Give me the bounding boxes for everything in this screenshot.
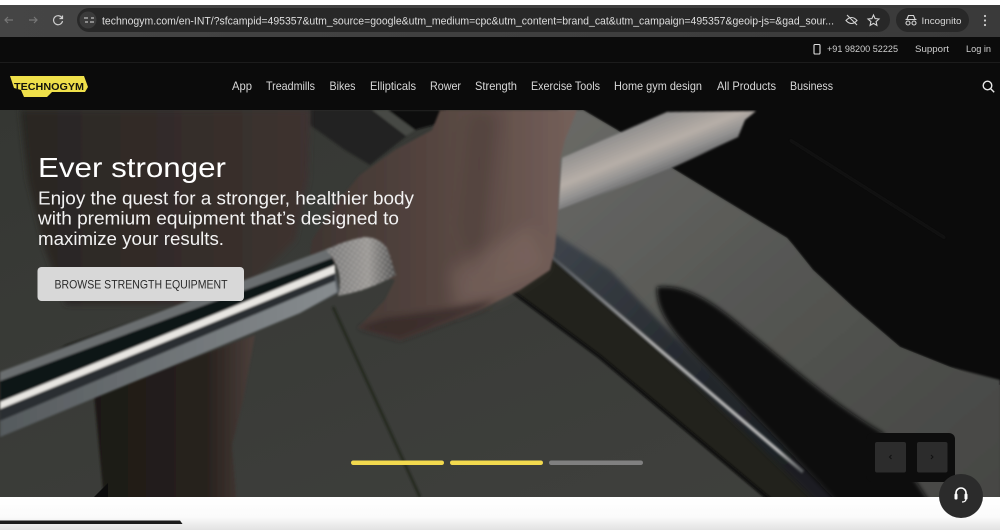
nav item: Bikes: Bikes — [330, 79, 356, 93]
icon: forward arrow — [29, 17, 37, 23]
login link: Log in — [966, 44, 991, 55]
url text: technogym.com/en-INT/?sfcampid=495357&utm_source=google&utm_medium=cpc&utm_content=brand_cat&utm_campaign=495357&geoip-js=&gad_sour... — [102, 16, 834, 28]
bar upper band — [0, 248, 332, 381]
lower leg — [94, 335, 255, 510]
icon: site settings — [80, 12, 96, 28]
knuckle highlight — [451, 234, 538, 305]
incognito label: Incognito — [922, 16, 962, 27]
hero description — [37, 188, 414, 249]
nav item: App: App — [232, 79, 252, 93]
icon: incognito — [906, 16, 916, 25]
nav item: Home gym design: Home gym design — [614, 79, 702, 93]
hero photo: hand gripping barbell — [0, 110, 1000, 515]
bar black band — [0, 258, 335, 402]
hero description: Enjoy the quest for a stronger, healthier body — [38, 188, 414, 208]
utility bar — [814, 44, 991, 55]
nav item: Business: Business — [790, 79, 833, 93]
upper thigh — [20, 110, 310, 305]
hero description: with premium equipment that’s designed to — [37, 208, 399, 228]
icon: menu dots — [984, 15, 986, 26]
black background region — [583, 110, 1000, 385]
icon: eye slash — [846, 15, 857, 25]
floor seam — [333, 307, 420, 497]
phone number: +91 98200 52225 — [827, 44, 898, 55]
equipment platform — [530, 110, 1000, 510]
right knurled bar section — [558, 111, 756, 210]
carousel arrow controls — [866, 433, 955, 482]
button: next — [917, 442, 948, 472]
platform blue channel — [554, 234, 812, 475]
ankle shadow — [94, 483, 108, 497]
platform cut-out hole — [657, 287, 935, 510]
platform reflected streak — [550, 255, 803, 472]
hand — [310, 110, 577, 340]
hero heading: Ever stronger — [38, 152, 226, 183]
left chrome bar section — [0, 248, 340, 437]
incognito pill — [896, 8, 969, 32]
main navigation — [232, 79, 833, 93]
support link: Support — [915, 44, 949, 55]
nav item: Rower: Rower — [430, 79, 461, 93]
icon: search — [983, 81, 994, 92]
icon: headset — [954, 488, 968, 502]
hero description: maximize your results. — [38, 229, 224, 249]
hand shading — [470, 116, 495, 246]
nav item: Strength: Strength — [475, 79, 517, 93]
bar body — [2, 260, 340, 382]
icon: phone — [814, 44, 820, 54]
bar lower band — [50, 280, 338, 414]
support chat button — [939, 474, 983, 518]
site header — [0, 37, 1000, 110]
carousel progress bars — [351, 460, 643, 465]
icon: star — [868, 15, 879, 25]
address bar pill — [77, 8, 890, 32]
page background footer strip — [0, 497, 1000, 530]
logo: Technogym — [10, 76, 88, 97]
barbell knurled end — [326, 237, 396, 296]
nav item: Exercise Tools: Exercise Tools — [531, 79, 600, 93]
button: browse strength equipment: BROWSE STRENGTH EQUIPMENT — [54, 278, 228, 292]
bar white highlight — [0, 265, 335, 409]
icon: reload — [54, 16, 62, 25]
bottom dark element — [0, 520, 182, 524]
bar dark band — [0, 273, 335, 421]
platform dark edge — [513, 292, 780, 508]
nav item: Treadmills: Treadmills — [266, 79, 315, 93]
button: previous — [875, 442, 906, 472]
icon: back arrow — [5, 17, 13, 23]
shadow above bar — [62, 332, 101, 347]
nav item: All Products: All Products — [717, 79, 776, 93]
browser chrome bar — [0, 0, 1000, 37]
platform front face — [516, 259, 814, 497]
background stripes — [310, 110, 445, 165]
logo: Technogym: TECHNOGYM — [14, 81, 84, 93]
button: browse strength equipment — [38, 267, 244, 301]
faint streak in the dark background — [890, 204, 892, 205]
hand bottom shadow — [358, 300, 495, 340]
nav item: Ellipticals: Ellipticals — [370, 79, 416, 93]
